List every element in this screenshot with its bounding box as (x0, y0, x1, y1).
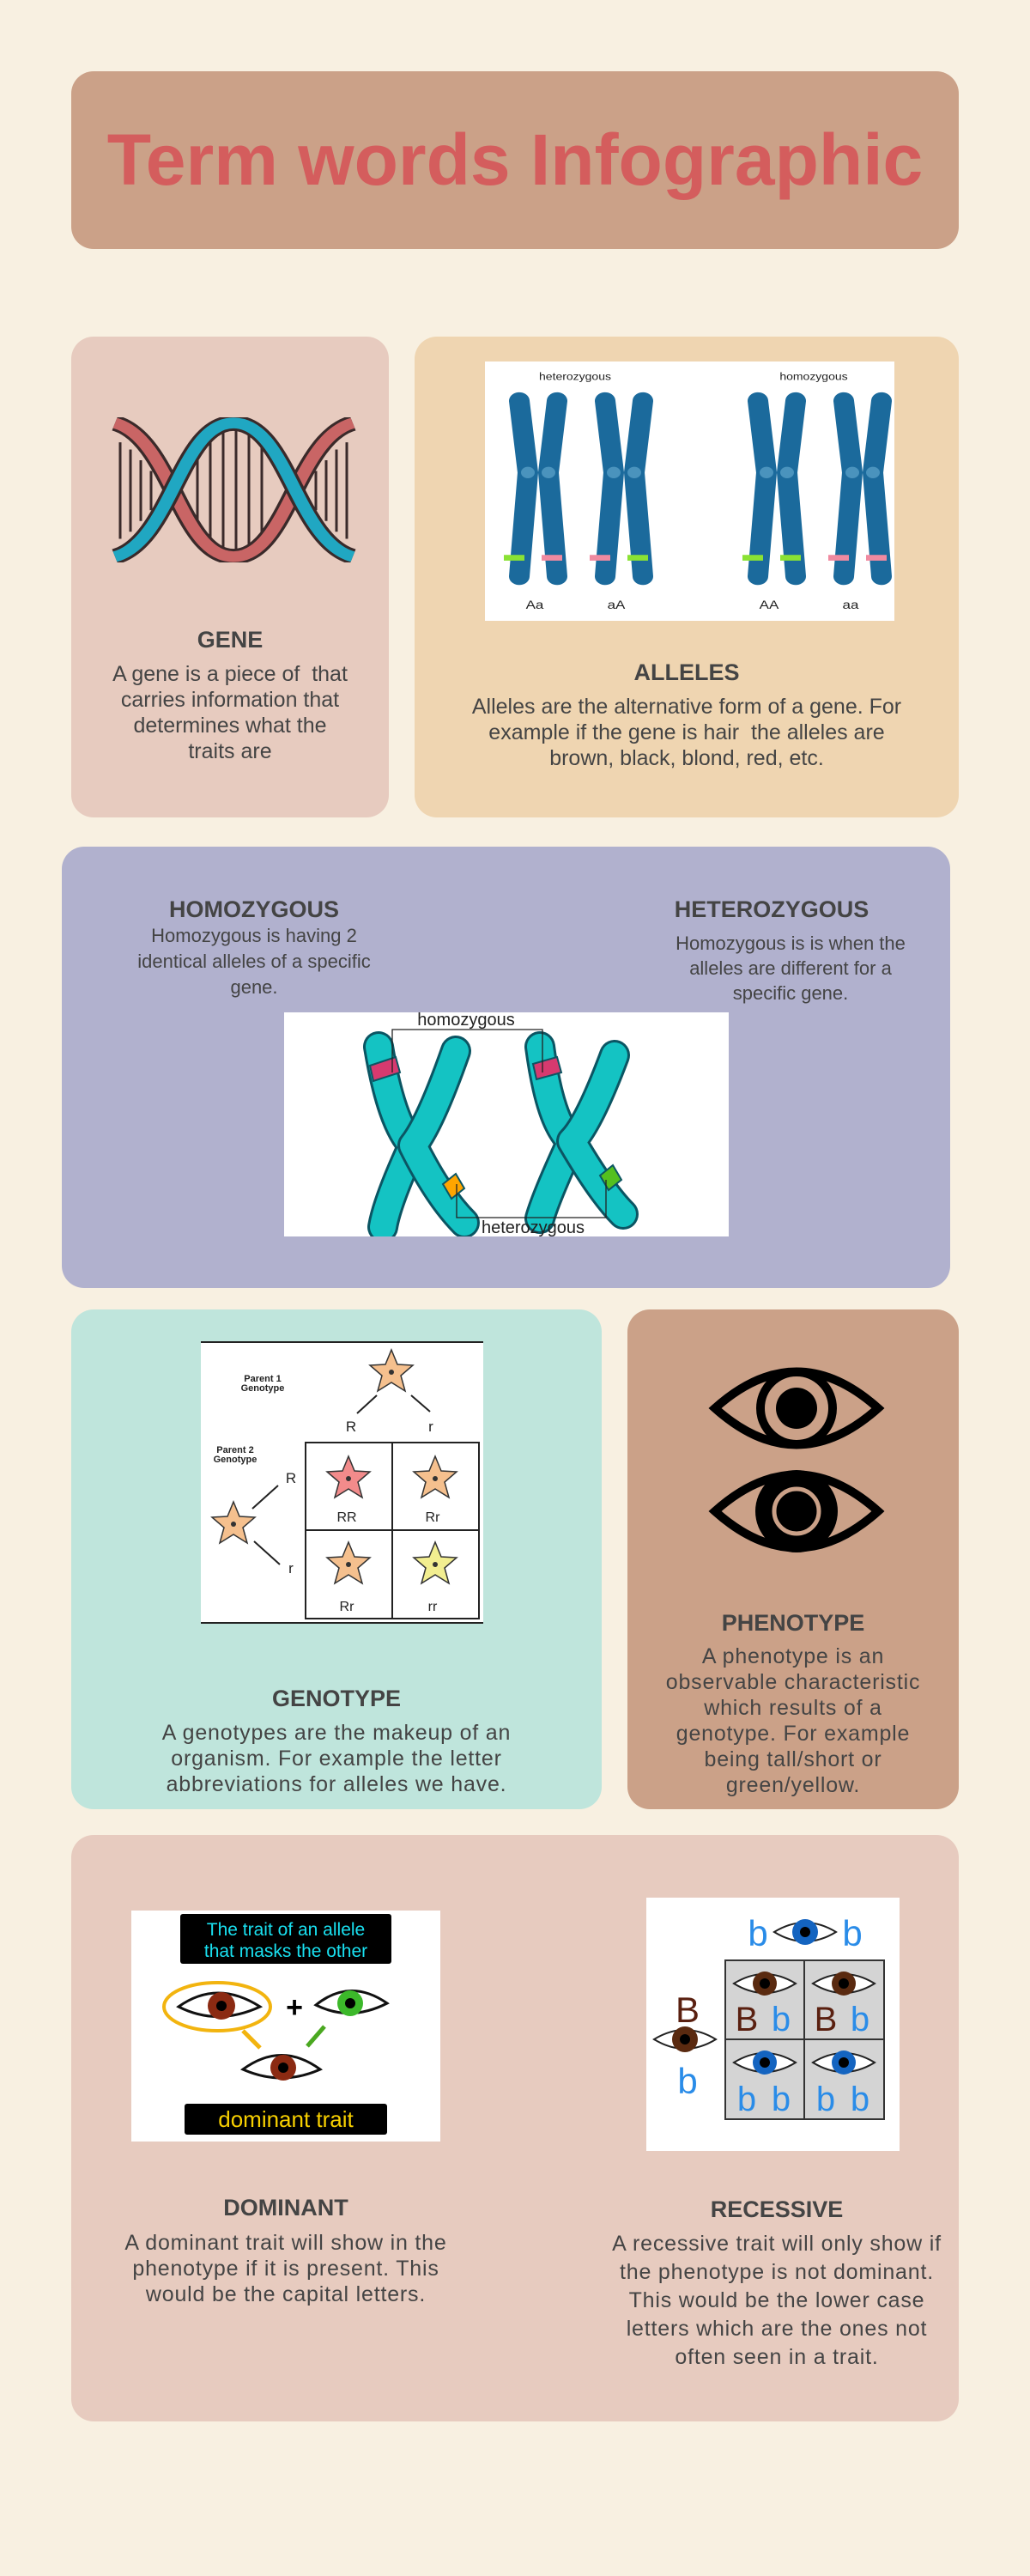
text: alleles definition: example if the gene is hair the alleles are (488, 720, 885, 744)
panel: gene (71, 337, 389, 817)
text: dominant definition (124, 2231, 447, 2306)
text: dominant definition: A dominant trait will show in the (124, 2231, 447, 2255)
panel: dominant / recessive (71, 1835, 959, 2421)
text: recessive definition: the phenotype is not dominant. (620, 2260, 934, 2284)
text: dominant definition: phenotype if it is present. This (132, 2257, 439, 2281)
text: heterozygous definition: alleles are different for a (689, 957, 892, 979)
image: Punnett square of flowers: RR (336, 1510, 357, 1525)
text: alleles definition: brown, black, blond, red, etc. (549, 746, 824, 770)
text: gene definition: A gene is a piece of that (112, 662, 348, 686)
image: Punnett square of flowers: Genotype (214, 1455, 257, 1465)
panel: alleles (415, 337, 959, 817)
image: Punnett square of flowers: Rr (340, 1600, 354, 1614)
icon: DNA helix (112, 417, 355, 562)
text: genotype definition: A genotypes are the makeup of an (162, 1721, 511, 1745)
image: recessive punnett square: b (772, 2081, 791, 2118)
image: Punnett square of flowers: R (346, 1419, 356, 1435)
text: genotype definition (161, 1721, 511, 1796)
text: recessive definition: A recessive trait will only show if (612, 2232, 942, 2256)
text: gene definition: carries information that (121, 688, 339, 712)
text: heterozygous definition: specific gene. (733, 982, 848, 1004)
text: homozygous definition: identical alleles of a specific (137, 951, 371, 972)
image: recessive punnett square: b (851, 2001, 869, 2038)
image: Punnett square of flowers: r (288, 1560, 294, 1577)
text: phenotype definition: genotype. For example (676, 1722, 910, 1746)
image: recessive punnett square: b (772, 2001, 791, 2038)
text: recessive definition: often seen in a trait. (675, 2345, 879, 2369)
heading: genotype: GENOTYPE (272, 1686, 401, 1711)
panel: phenotype (627, 1309, 959, 1809)
text: gene definition (112, 662, 348, 763)
image: allele chromosomes (485, 361, 894, 621)
image: recessive punnett square: B (736, 2001, 758, 2038)
title: Term words Infographic (107, 119, 923, 200)
text: alleles definition (472, 695, 901, 770)
text: dominant definition: would be the capital letters. (146, 2282, 426, 2306)
image: Punnett square of flowers: Parent 2 (216, 1445, 254, 1455)
image: Punnett square of flowers (201, 1341, 483, 1624)
image: allele chromosomes: aA (608, 598, 626, 611)
text: recessive definition: letters which are the ones not (627, 2317, 927, 2341)
image: Punnett square of flowers: r (428, 1419, 433, 1435)
image: Punnett square of flowers: R (286, 1470, 296, 1486)
image: dominant trait: that masks the other (204, 1941, 367, 1961)
image: Punnett square of flowers: rr (428, 1600, 438, 1614)
image: allele chromosomes: aa (843, 598, 859, 611)
text: phenotype definition (666, 1644, 920, 1797)
panel: homozygous / heterozygous (62, 847, 950, 1288)
image: recessive punnett square: b (851, 2081, 869, 2118)
image: recessive punnett square: B (815, 2001, 837, 2038)
heading: alleles: ALLELES (633, 659, 740, 685)
image: recessive punnett square: b (816, 2081, 835, 2118)
image: dominant trait (131, 1911, 440, 2142)
text: homozygous definition (137, 925, 371, 998)
text: heterozygous definition: Homozygous is is when the (676, 933, 906, 954)
text: phenotype definition: which results of a (704, 1696, 882, 1720)
image: recessive punnett square (646, 1898, 900, 2151)
image: Punnett square of flowers: Parent 1 (244, 1374, 282, 1384)
text: genotype definition: organism. For example the letter (171, 1747, 502, 1771)
image: X chromosomes (284, 1012, 729, 1236)
image: recessive punnett square: b (677, 2061, 698, 2101)
image: allele chromosomes: homozygous (779, 371, 848, 382)
image: allele chromosomes: Aa (526, 598, 544, 611)
image: dominant trait: dominant trait (218, 2106, 354, 2132)
text: phenotype definition: being tall/short or (704, 1747, 882, 1771)
text: gene definition: traits are (188, 739, 272, 763)
title banner (71, 71, 959, 249)
image: recessive punnett square: b (748, 1913, 768, 1953)
image: allele chromosomes: AA (760, 598, 779, 611)
text: heterozygous definition (676, 933, 906, 1004)
heading: phenotype: PHENOTYPE (722, 1610, 864, 1636)
text: phenotype definition: observable characteristic (666, 1670, 920, 1694)
image: dominant trait: The trait of an allele (207, 1920, 365, 1940)
text: homozygous definition: Homozygous is having 2 (151, 925, 357, 946)
text: phenotype definition: green/yellow. (726, 1773, 860, 1797)
text: recessive definition (612, 2232, 942, 2369)
image: dominant trait: + (286, 1991, 303, 2024)
image: Punnett square of flowers: Rr (426, 1510, 440, 1525)
heading: recessive: RECESSIVE (711, 2196, 843, 2222)
text: genotype definition: abbreviations for alleles we have. (167, 1772, 506, 1796)
icon: two eyes (709, 1367, 884, 1552)
heading: dominant: DOMINANT (223, 2195, 348, 2221)
heading: homozygous: HOMOZYGOUS (169, 896, 339, 922)
image: recessive punnett square: b (737, 2081, 756, 2118)
image: recessive punnett square: B (676, 1990, 700, 2030)
heading: gene: GENE (197, 627, 263, 653)
text: gene definition: determines what the (133, 714, 327, 738)
text: alleles definition: Alleles are the alternative form of a gene. For (472, 695, 901, 719)
panel: genotype (71, 1309, 602, 1809)
text: homozygous definition: gene. (230, 976, 278, 998)
heading: heterozygous: HETEROZYGOUS (675, 896, 869, 922)
image: allele chromosomes: heterozygous (539, 371, 611, 382)
image: recessive punnett square: b (842, 1913, 863, 1953)
text: recessive definition: This would be the lower case (629, 2288, 924, 2312)
text: phenotype definition: A phenotype is an (702, 1644, 884, 1668)
image: Punnett square of flowers: Genotype (241, 1383, 284, 1394)
